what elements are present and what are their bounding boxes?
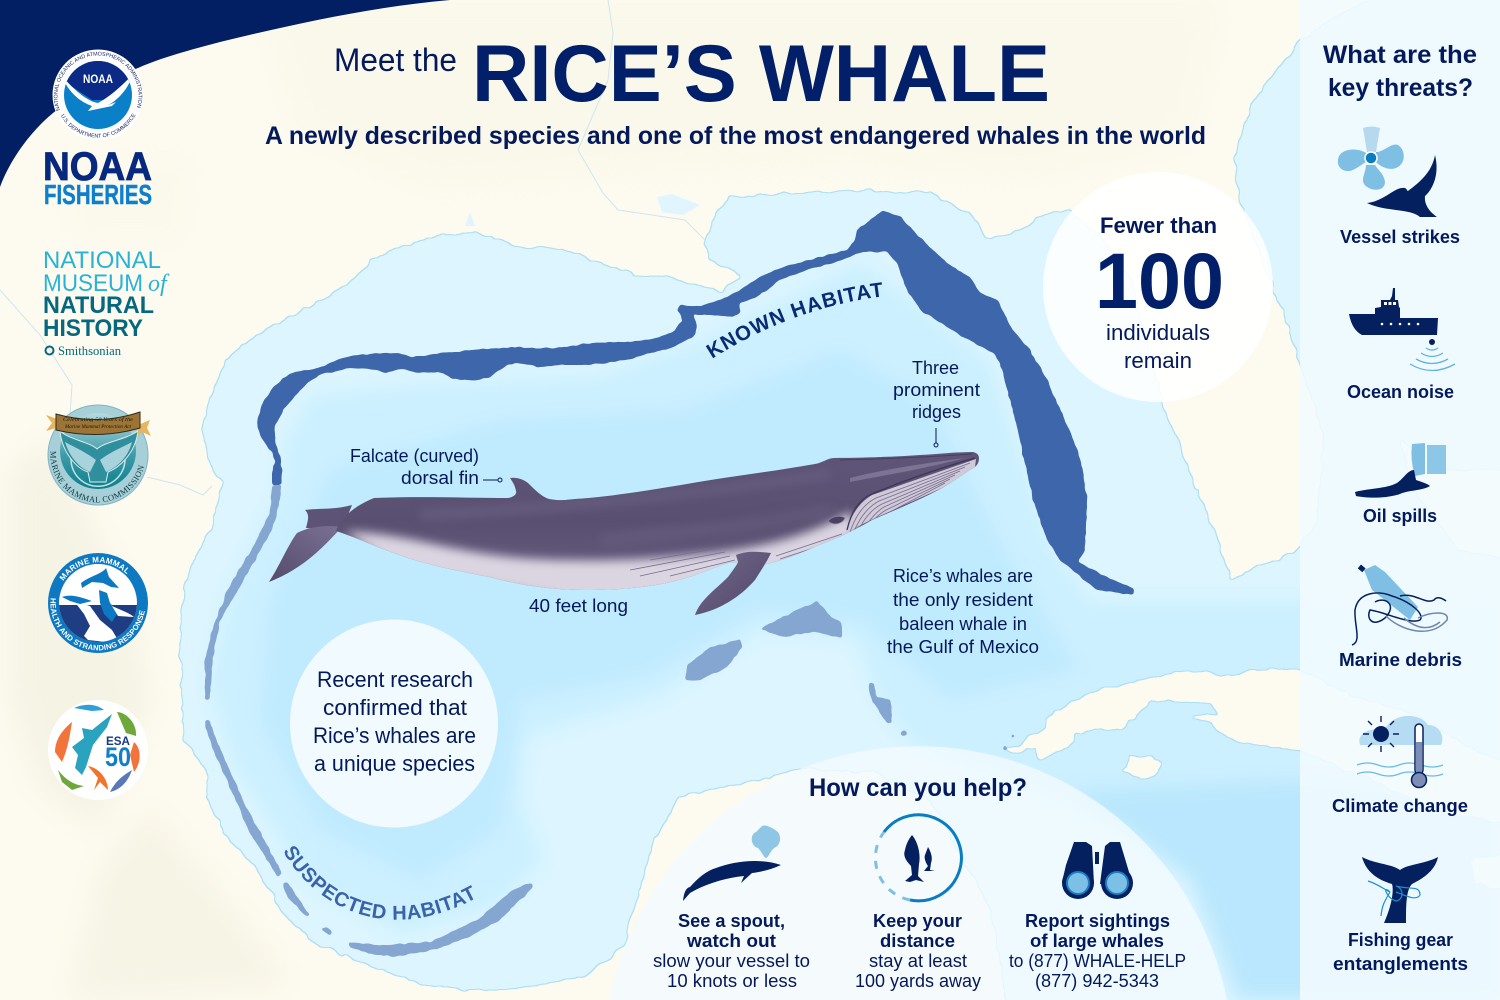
NOAA seal — [52, 50, 144, 140]
callout: unique species: confirmed that — [323, 695, 468, 720]
icon: binoculars — [1062, 842, 1133, 899]
ESA 50 logo — [48, 700, 148, 800]
whale lower fluke — [269, 526, 342, 582]
right panel background — [1300, 0, 1500, 1000]
land: Bahamas and Jamaica — [1400, 440, 1500, 890]
ESA 50 logo: ESA — [106, 734, 130, 748]
NOAA seal: U.S. DEPARTMENT OF COMMERCE — [61, 113, 136, 138]
Marine Mammal Commission logo: MARINE MAMMAL COMMISSION — [50, 451, 144, 502]
help text: see a spout: slow your vessel to — [653, 950, 810, 971]
gold banner — [46, 412, 151, 436]
annotation: three ridges: prominent — [893, 379, 980, 400]
help text: report sightings: to (877) WHALE-HELP — [1009, 950, 1186, 971]
threat: oil spills — [1355, 443, 1446, 526]
ESA 50 logo: 50 — [105, 742, 131, 772]
whale throat pleats — [630, 454, 976, 576]
threat: vessel strikes — [1338, 126, 1460, 247]
whale eye — [828, 516, 845, 524]
callout: unique species: Rice’s whales are — [313, 723, 476, 748]
navy corner banner — [0, 0, 450, 187]
threat: oil spills: Oil spills — [1363, 505, 1437, 526]
help text: keep your distance — [855, 910, 982, 991]
text block: only resident baleen whale: the only resident — [893, 589, 1033, 610]
panel: how can you help: How can you help? — [809, 774, 1027, 802]
gold banner: Marine Mammal Protection Act — [64, 424, 131, 430]
whale body — [336, 452, 979, 590]
callout: fewer than 100: 100 — [1095, 236, 1224, 325]
threat: ocean noise — [1347, 288, 1455, 402]
icon: keep distance ring — [875, 815, 961, 901]
land: Cuba — [1007, 670, 1500, 825]
threat: fishing gear entanglements: entanglements — [1333, 953, 1468, 974]
annotation: dorsal fin: Falcate (curved) — [350, 445, 479, 466]
National Museum of Natural History logo — [43, 247, 170, 358]
threats heading: key threats? — [1328, 74, 1473, 102]
National Museum of Natural History logo: NATURAL — [43, 292, 154, 319]
land lines: rivers and borders — [0, 0, 705, 495]
text block: only resident baleen whale: baleen whale in — [899, 613, 1027, 634]
help text: report sightings — [1009, 910, 1186, 991]
land: Isle of Youth — [1121, 755, 1162, 780]
inland lakes — [465, 194, 700, 226]
text block: only resident baleen whale — [887, 565, 1039, 657]
help text: keep your distance: stay at least — [869, 950, 967, 971]
land: Yucatan — [490, 770, 1010, 1000]
callout: unique species — [290, 620, 498, 828]
Marine Mammal Health and Stranding Response logo: HEALTH AND STRANDING RESPONSE — [50, 598, 145, 650]
National Museum of Natural History logo: HISTORY — [43, 315, 143, 342]
help text: keep your distance: 100 yards away — [855, 970, 982, 991]
annotation: dorsal fin — [350, 445, 502, 488]
help text: report sightings: of large whales — [1030, 930, 1164, 951]
text block: only resident baleen whale: the Gulf of Mexico — [887, 636, 1039, 657]
help text: report sightings: Report sightings — [1025, 910, 1170, 931]
Marine Mammal Commission logo — [46, 404, 151, 506]
help text: keep your distance: Keep your — [873, 910, 962, 931]
callout: unique species: a unique species — [314, 751, 475, 776]
NOAA Fisheries logo: FISHERIES — [44, 179, 152, 210]
help text: report sightings: (877) 942-5343 — [1035, 970, 1159, 991]
icon: spouting whale — [683, 826, 781, 901]
map: deep water — [208, 262, 1500, 1000]
help text: see a spout — [653, 910, 810, 991]
annotation: length: 40 feet long — [529, 595, 628, 616]
callout: fewer than 100: remain — [1124, 348, 1192, 373]
title: RICE’S WHALE — [472, 29, 1050, 119]
annotation: dorsal fin: dorsal fin — [401, 467, 479, 488]
Marine Mammal Health and Stranding Response logo — [48, 553, 148, 653]
known habitat area — [257, 210, 1134, 595]
whale upper fluke — [305, 505, 352, 530]
help text: see a spout: 10 knots or less — [667, 970, 797, 991]
threat: marine debris — [1339, 565, 1462, 670]
National Museum of Natural History logo: Smithsonian — [58, 344, 122, 358]
label: suspected habitat: SUSPECTED HABITAT — [284, 846, 474, 920]
whale shading and belly — [345, 454, 976, 605]
NOAA Fisheries logo — [43, 50, 152, 210]
whale flipper — [695, 552, 771, 615]
National Museum of Natural History logo: NATIONAL — [43, 247, 161, 274]
panel: how can you help — [609, 746, 1227, 1000]
callout: unique species: Recent research — [317, 667, 473, 692]
suspected habitat area — [205, 485, 1015, 957]
threat: fishing gear entanglements: Fishing gear — [1348, 929, 1453, 950]
callout: fewer than 100: Fewer than — [1100, 213, 1217, 238]
panel: key threats — [1323, 41, 1477, 974]
threat: climate change — [1332, 716, 1468, 816]
gold banner: Celebrating 50 Years of the — [63, 416, 134, 423]
help text: see a spout: See a spout, — [678, 910, 785, 931]
threat: fishing gear entanglements — [1333, 857, 1468, 974]
whale illustration — [269, 452, 979, 615]
threats heading: What are the — [1323, 41, 1477, 69]
threat: vessel strikes: Vessel strikes — [1340, 226, 1460, 247]
threats heading — [1323, 41, 1477, 102]
label: known habitat: KNOWN HABITAT — [706, 282, 882, 358]
annotation: three ridges: ridges — [912, 401, 961, 422]
callout: fewer than 100 — [1043, 172, 1273, 402]
threat: ocean noise: Ocean noise — [1347, 381, 1454, 402]
help text: see a spout: watch out — [686, 930, 776, 951]
National Museum of Natural History logo: MUSEUM — [43, 270, 143, 297]
subtitle: A newly described species and one of the most endangered whales in the world — [265, 122, 1206, 150]
callout: fewer than 100: individuals — [1106, 320, 1210, 345]
NOAA Fisheries logo: NOAA — [43, 145, 152, 189]
annotation: three ridges: Three — [912, 357, 959, 378]
NOAA seal: NATIONAL OCEANIC AND ATMOSPHERIC ADMINISTRATION — [54, 52, 142, 111]
text block: only resident baleen whale: Rice’s whales are — [893, 565, 1033, 586]
help text: keep your distance: distance — [880, 930, 955, 951]
threat: marine debris: Marine debris — [1339, 649, 1462, 670]
annotation: three ridges — [893, 357, 980, 447]
Marine Mammal Health and Stranding Response logo: MARINE MAMMAL — [59, 556, 128, 581]
National Museum of Natural History logo: of — [148, 271, 170, 297]
NOAA seal: NOAA — [83, 74, 113, 86]
threat: climate change: Climate change — [1332, 795, 1468, 816]
title: Meet the — [334, 42, 457, 78]
